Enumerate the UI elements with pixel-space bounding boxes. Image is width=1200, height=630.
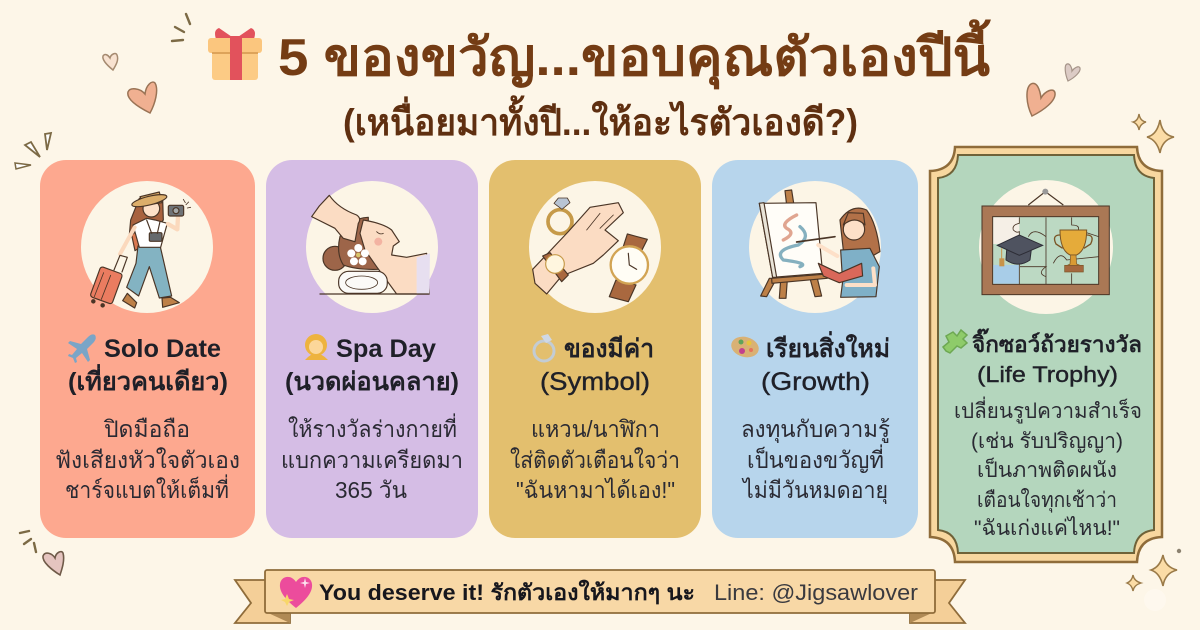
icon: spa massage <box>312 195 430 294</box>
text block: growth: ไม่มีวันหมดอายุ <box>741 477 888 504</box>
banner message: You deserve it! รักตัวเองให้มากๆ นะ <box>319 579 695 605</box>
text block: growth <box>741 416 890 504</box>
text block: spa day: 365 วัน <box>335 477 407 503</box>
panel: symbol <box>489 160 701 538</box>
text block: symbol <box>510 416 680 503</box>
text block: solo date: ปิดมือถือ <box>103 416 190 442</box>
title: 5 ของขวัญ...ขอบคุณตัวเองปีนี้ <box>278 19 991 90</box>
heading: life trophy: จิ๊กซอว์ถ้วยรางวัล <box>972 328 1142 357</box>
banner line handle: Line: @Jigsawlover <box>714 580 918 605</box>
text block: life trophy: (เช่น รับปริญญา) <box>971 430 1123 453</box>
icon: palette <box>729 334 761 360</box>
icon: ring hand and watch <box>533 198 648 302</box>
heading: spa day: Spa Day <box>336 335 436 363</box>
text block: life trophy <box>954 396 1142 540</box>
subtitle: (เหนื่อยมาทั้งปี...ให้อะไรตัวเองดี?) <box>343 95 858 143</box>
text block: symbol: "ฉันหามาได้เอง!" <box>516 477 675 503</box>
panel: spa day: (นวดผ่อนคลาย) <box>285 368 459 396</box>
panel: solo date: (เที่ยวคนเดียว) <box>68 364 228 396</box>
icon: framed jigsaw with cap and trophy <box>982 189 1109 295</box>
heading: symbol: ของมีค่า <box>564 335 654 363</box>
icon: sparkling heart <box>280 577 312 608</box>
text block: life trophy: "ฉันเก่งแค่ไหน!" <box>974 516 1120 540</box>
icon: puzzle piece <box>943 330 967 353</box>
panel: life trophy <box>930 147 1162 562</box>
banner ribbon <box>235 570 965 623</box>
icon: airplane <box>68 334 96 363</box>
panel: growth <box>712 160 918 538</box>
icon: gift box <box>208 28 262 80</box>
text block: solo date: ฟังเสียงหัวใจตัวเอง <box>55 447 240 473</box>
text block: solo date <box>55 416 240 503</box>
panel: growth: (Growth) <box>761 368 870 396</box>
icon: ring emoji <box>534 334 554 361</box>
text block: symbol: ใส่ติดตัวเตือนใจว่า <box>510 447 680 473</box>
text block: growth: ลงทุนกับความรู้ <box>741 416 890 443</box>
text block: spa day <box>281 413 463 503</box>
text block: life trophy: เปลี่ยนรูปความสำเร็จ <box>954 396 1142 424</box>
text block: life trophy: เตือนใจทุกเช้าว่า <box>977 488 1117 513</box>
text block: spa day: ให้รางวัลร่างกายที่ <box>288 413 457 442</box>
text block: symbol: แหวน/นาฬิกา <box>531 416 660 442</box>
text block: life trophy: เป็นภาพติดผนัง <box>977 456 1117 482</box>
panel: solo date <box>40 160 255 538</box>
icon: traveler with suitcase <box>90 192 191 308</box>
icon: girl painting at easel <box>759 190 880 298</box>
text block: growth: เป็นของขวัญที่ <box>747 444 884 473</box>
panel: symbol: (Symbol) <box>540 368 650 396</box>
heading: growth: เรียนสิ่งใหม่ <box>766 331 890 363</box>
panel: spa day <box>266 160 478 538</box>
text block: solo date: ชาร์จแบตให้เต็มที่ <box>65 474 229 503</box>
panel: life trophy: (Life Trophy) <box>977 362 1118 387</box>
icon: woman emoji <box>305 334 328 360</box>
text block: spa day: แบกความเครียดมา <box>281 447 463 473</box>
heading: solo date: Solo Date <box>104 335 221 363</box>
